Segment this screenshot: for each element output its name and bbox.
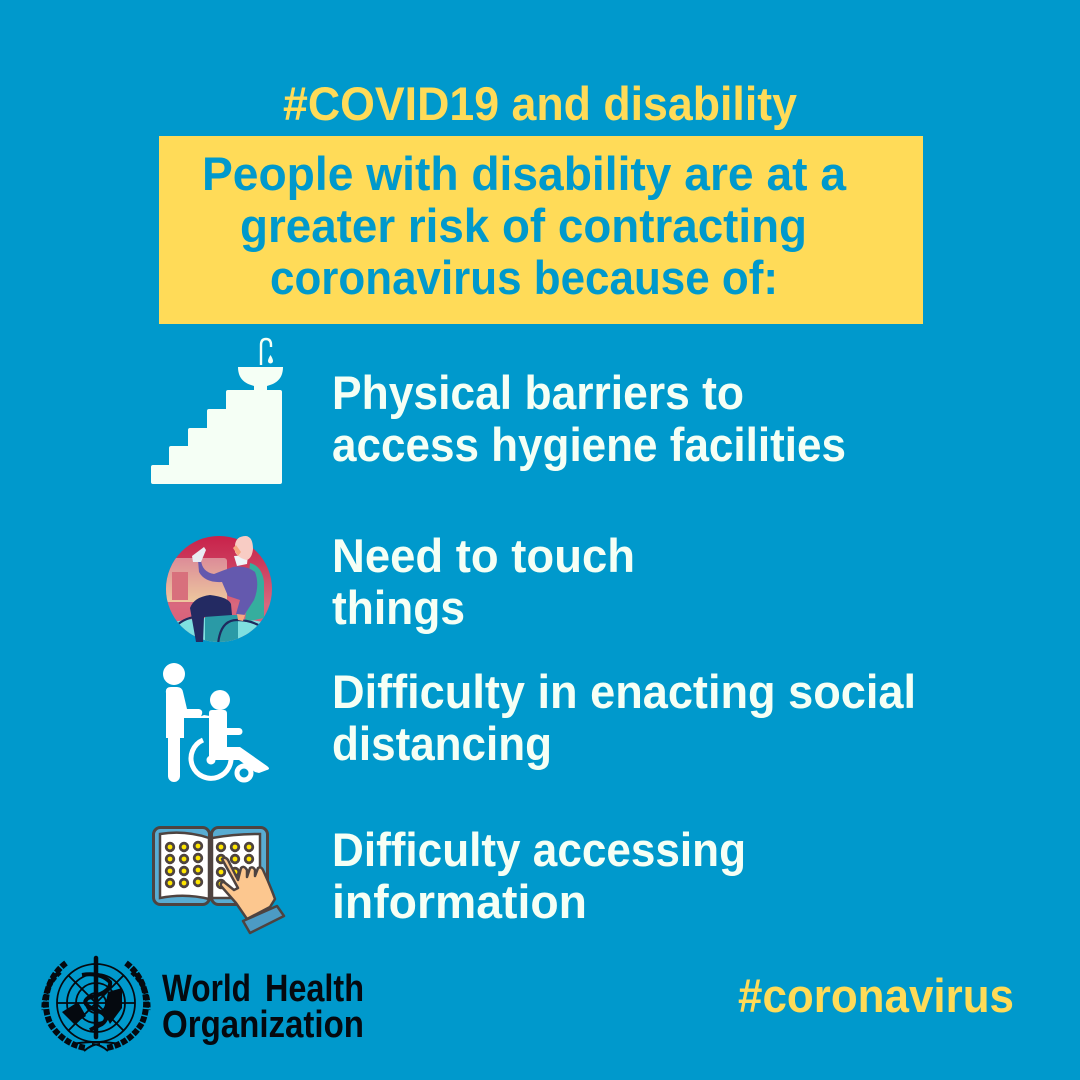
item text: physical barriers: access hygiene facilities — [332, 418, 846, 471]
WHO logo — [44, 958, 364, 1051]
item text: physical barriers — [332, 366, 846, 471]
icon: person in wheelchair cleaning — [166, 536, 272, 642]
headline text: People with disability are at a — [202, 147, 847, 200]
icon: carer pushing wheelchair — [163, 663, 269, 782]
organization name: World — [162, 968, 251, 1010]
item text: need to touch — [332, 529, 635, 634]
item text: accessing information: Difficulty accessing — [332, 823, 746, 876]
title: #COVID19 and disability — [283, 77, 797, 130]
figure — [190, 595, 232, 642]
item text: physical barriers: Physical barriers to — [332, 366, 744, 419]
panel: headline box — [159, 136, 923, 324]
hashtag: #coronavirus — [738, 969, 1014, 1022]
item text: accessing information: information — [332, 875, 587, 928]
item text: need to touch: things — [332, 581, 465, 634]
item text: social distancing: distancing — [332, 717, 552, 770]
item text: accessing information — [332, 823, 746, 928]
item text: need to touch: Need to touch — [332, 529, 635, 582]
icon: stairs to sink — [151, 339, 283, 484]
organization name — [162, 968, 364, 1046]
item text: social distancing: Difficulty in enacting social — [332, 665, 916, 718]
icon: braille book with hand — [154, 828, 284, 933]
headline text: greater risk of contracting — [240, 199, 807, 252]
emblem — [44, 958, 148, 1051]
headline text — [202, 147, 847, 304]
headline text: coronavirus because of: — [270, 251, 778, 304]
organization name: Organization — [162, 1004, 364, 1046]
item text: social distancing — [332, 665, 916, 770]
organization name: Health — [265, 968, 364, 1010]
